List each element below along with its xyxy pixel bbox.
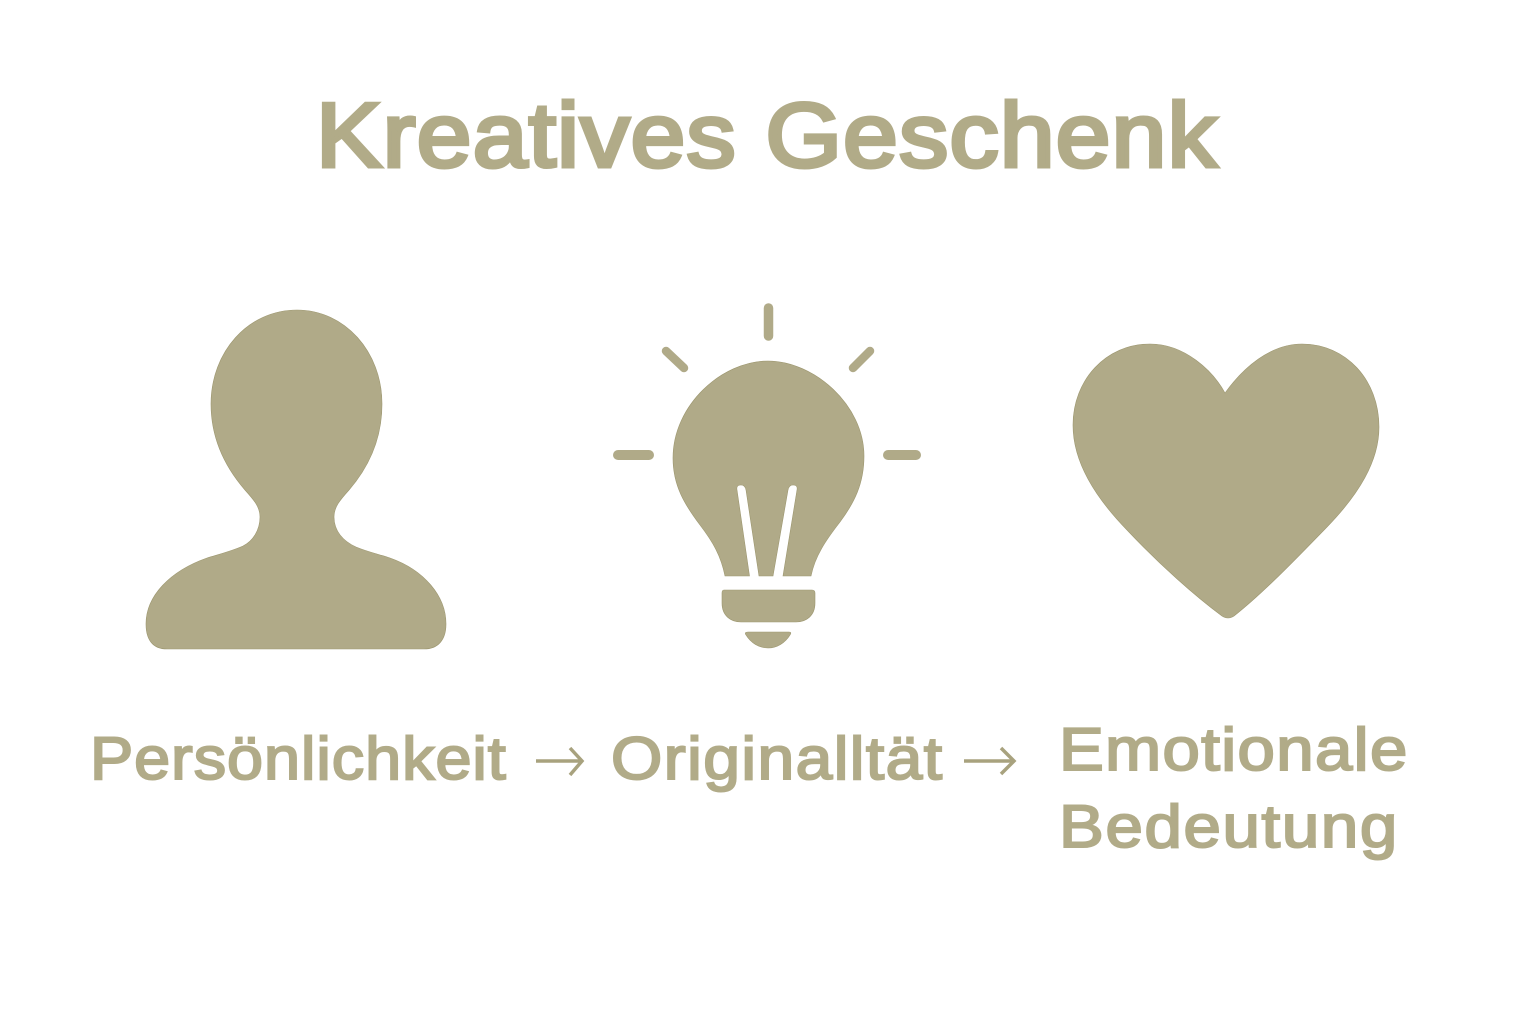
icon: bulb rays [618,308,916,455]
icon: light bulb [618,308,916,648]
label: Originalität: Originalltät [611,726,943,792]
icon: person silhouette [146,310,446,649]
title: Kreatives Geschenk [316,85,1217,187]
label: Emotionale Bedeutung: Emotionale [1059,716,1407,783]
arrow: second [964,748,1014,774]
icon: bulb tip [745,632,791,648]
arrow: first [536,748,582,775]
label: Persönlichkeit: Persönlichkeit [90,725,506,792]
icon: heart [1073,344,1379,618]
icon: bulb glass [673,361,864,576]
icon: bulb base [722,590,815,622]
label: Emotionale Bedeutung [1059,716,1407,860]
label: Emotionale Bedeutung: Bedeutung [1059,793,1397,860]
